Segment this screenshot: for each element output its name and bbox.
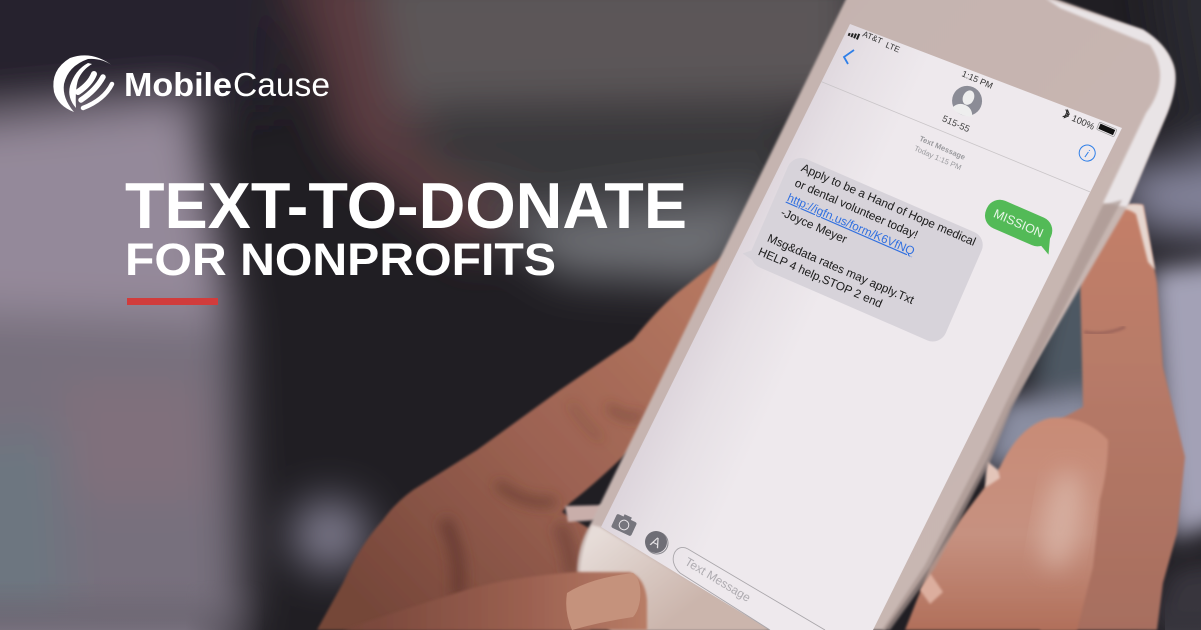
- screen content: [740, 12, 1117, 376]
- message input: [673, 547, 825, 630]
- status bar time: 1:15 PM: [960, 69, 994, 91]
- contact number: 515-55: [941, 113, 971, 134]
- logo globe mark: [53, 55, 113, 112]
- camera icon: [611, 511, 638, 536]
- battery icon: [1096, 122, 1117, 137]
- red accent bar: [127, 298, 218, 305]
- right hand: [905, 204, 1185, 630]
- left hand: [317, 255, 745, 630]
- app store icon: A: [648, 533, 664, 552]
- finger tip edge: [1115, 204, 1155, 270]
- phone screen: [601, 24, 1122, 630]
- logo wordmark: Cause: [233, 66, 330, 103]
- grey message bubble: Apply to be a Hand of Hope medical: [799, 161, 978, 249]
- header divider: [822, 76, 1090, 197]
- finger joint crease: [1084, 327, 1125, 333]
- app store icon: [645, 531, 668, 554]
- status bar signal and carrier: AT&T: [861, 29, 884, 46]
- message input: Text Message: [682, 555, 753, 605]
- subtitle: FOR NONPROFITS: [125, 234, 556, 285]
- avatar icon: [947, 81, 987, 121]
- bluetooth glyph: [1063, 109, 1070, 119]
- logo wordmark: Mobile: [124, 66, 232, 103]
- lower bezel: [580, 525, 770, 630]
- front finger: [905, 418, 1108, 630]
- battery percent: 100%: [1070, 113, 1096, 132]
- grey message bubble: http://igfn.us/form/K6VfNQ: [785, 190, 917, 258]
- side frame: [882, 200, 1122, 630]
- info icon: [1077, 143, 1098, 164]
- status bar signal and carrier: LTE: [884, 40, 902, 55]
- info icon: i: [1083, 148, 1091, 161]
- tall finger: [1040, 205, 1185, 630]
- logo: [53, 55, 330, 112]
- green MISSION bubble: MISSION: [991, 207, 1045, 240]
- back chevron: [844, 50, 854, 64]
- grey message bubble: -Joyce Meyer: [779, 205, 849, 246]
- hand creases: [447, 405, 640, 592]
- grey message bubble: HELP 4 help,STOP 2 end: [756, 244, 885, 311]
- phone body: [577, 0, 1175, 630]
- grey message bubble: or dental volunteer today!: [793, 176, 920, 242]
- green MISSION bubble: [980, 195, 1061, 255]
- grey message bubble: [740, 151, 987, 346]
- message time stamp: [913, 134, 967, 172]
- grey message bubble: Msg&data rates may apply.Txt: [765, 231, 917, 307]
- light object behind hand: [565, 505, 606, 522]
- status bar signal and carrier: [848, 29, 902, 55]
- message time stamp: Today 1:15 PM: [913, 144, 963, 172]
- fingernail: [566, 573, 640, 630]
- title: TEXT-TO-DONATE: [125, 169, 687, 242]
- lower left finger: [343, 572, 647, 630]
- logo wordmark: [124, 66, 330, 103]
- white phone rim: [1045, 0, 1175, 207]
- inner finger highlights: [985, 461, 1000, 488]
- message time stamp: Text Message: [918, 134, 967, 162]
- finger highlight: [1034, 467, 1090, 573]
